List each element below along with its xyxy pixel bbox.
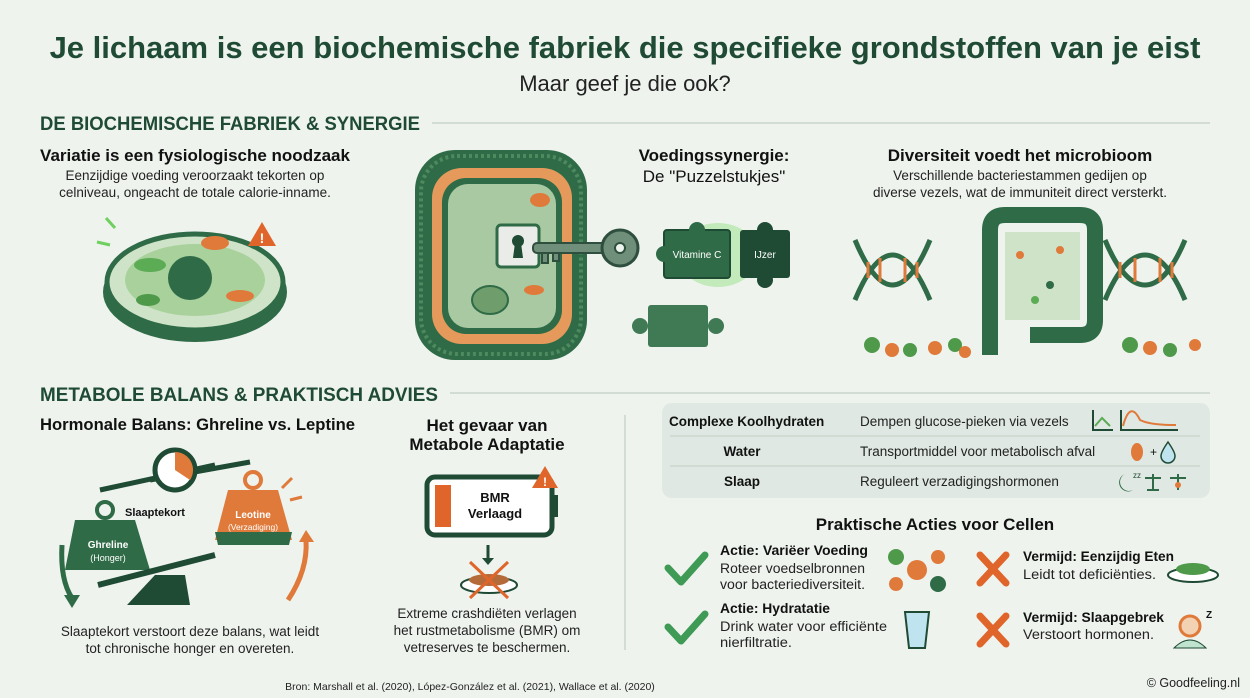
icon: battery: !: [543, 475, 547, 489]
icon: scale: Slaaptekort: [125, 507, 185, 519]
icon: cell: !: [260, 230, 264, 246]
panel: metabole adaptatie: [394, 416, 580, 655]
panel: microbioom: [855, 146, 1201, 358]
action: hydratatie: [668, 600, 929, 650]
icon: moon and scales: zz: [1133, 471, 1141, 480]
icon: cell: [97, 218, 287, 342]
panel: metabole adaptatie: Het gevaar van: [427, 416, 547, 435]
table: nutrients: Slaap: [724, 474, 760, 489]
table: nutrients: Reguleert verzadigingshormonen: [860, 474, 1059, 489]
action: hydratatie: Drink water voor efficiënte: [720, 619, 887, 634]
table: nutrients: Water: [723, 444, 761, 459]
panel: hormonale balans: Slaaptekort verstoort deze balans, wat leidt: [61, 624, 319, 639]
title: Je lichaam is een biochemische fabriek die specifieke grondstoffen van je eist: [50, 30, 1200, 65]
footer: sources: Bron: Marshall et al. (2020), López-González et al. (2021), Wallace et al. (2020): [285, 681, 655, 693]
action: varieer voeding: Actie: Variëer Voeding: [720, 542, 868, 558]
table: nutrients: Dempen glucose-pieken via vezels: [860, 414, 1069, 429]
icon: scale: (Honger): [90, 553, 126, 563]
icon: scale: Ghreline: [88, 540, 129, 551]
action: vermijd slaapgebrek: Z: [1206, 610, 1212, 621]
section heading: metabole: METABOLE BALANS & PRAKTISCH ADVIES: [40, 385, 438, 406]
panel: variatie: celniveau, ongeacht de totale calorie-inname.: [59, 185, 331, 200]
panel: variatie: Eenzijdige voeding veroorzaakt tekorten op: [66, 168, 324, 183]
panel: metabole adaptatie: het rustmetabolisme (BMR) om: [394, 623, 580, 638]
icon: moon and scales: [1119, 471, 1186, 491]
action: hydratatie: Actie: Hydratatie: [720, 600, 830, 616]
table: nutrients: [662, 403, 1210, 498]
panel: voedingssynergie: De "Puzzelstukjes": [643, 167, 785, 186]
panel: voedingssynergie: Voedingssynergie:: [639, 146, 789, 165]
action: vermijd slaapgebrek: Verstoort hormonen.: [1023, 627, 1154, 642]
action: varieer voeding: [668, 542, 946, 592]
icon: scale: Leotine: [235, 510, 271, 521]
icon: battery: [427, 466, 558, 598]
icon: kidney and drop: [1131, 442, 1175, 463]
action: varieer voeding: voor bacteriediversiteit.: [720, 577, 865, 592]
section heading: fabriek: DE BIOCHEMISCHE FABRIEK & SYNERGIE: [40, 114, 420, 135]
action: varieer voeding: Roteer voedselbronnen: [720, 561, 865, 576]
panel: hormonale balans: tot chronische honger en overeten.: [86, 641, 294, 656]
heading: praktische acties: Praktische Acties voor Cellen: [816, 515, 1054, 534]
icon: battery: BMR: [480, 490, 510, 505]
footer: brand: © Goodfeeling.nl: [1147, 676, 1240, 690]
icon: scale: [62, 450, 314, 608]
icon: battery: Verlaagd: [468, 506, 522, 521]
action: vermijd eenzijdig: Vermijd: Eenzijdig Eten: [1023, 548, 1174, 564]
icon: scale: (Verzadiging): [228, 522, 278, 532]
panel: metabole adaptatie: Extreme crashdiëten verlagen: [397, 606, 577, 621]
panel: metabole adaptatie: vetreserves te beschermen.: [404, 640, 570, 655]
panel: variatie: Variatie is een fysiologische noodzaak: [40, 146, 350, 165]
panel: microbioom: diverse vezels, wat de immuniteit direct versterkt.: [873, 185, 1167, 200]
panel: metabole adaptatie: Metabole Adaptatie: [409, 435, 565, 454]
icon: puzzle pieces: Vitamine C: [673, 250, 721, 261]
icon: glucose graphs: [1093, 410, 1178, 430]
icon: DNA and gut: [855, 215, 1201, 358]
panel: hormonale balans: [40, 415, 355, 656]
panel: variatie: [40, 146, 350, 342]
subtitle: Maar geef je die ook?: [519, 71, 731, 96]
action: vermijd slaapgebrek: [980, 609, 1212, 648]
icon: factory cell with key: [415, 150, 638, 360]
icon: puzzle pieces: [632, 222, 790, 347]
action: vermijd slaapgebrek: Vermijd: Slaapgebrek: [1023, 609, 1164, 625]
panel: microbioom: Verschillende bacteriestammen gedijen op: [893, 168, 1147, 183]
table: nutrients: Complexe Koolhydraten: [669, 414, 824, 429]
icon: kidney and drop: +: [1150, 445, 1157, 459]
panel: microbioom: Diversiteit voedt het microbioom: [888, 146, 1152, 165]
action: vermijd eenzijdig: [980, 548, 1218, 583]
icon: puzzle pieces: IJzer: [754, 250, 777, 261]
table: nutrients: Transportmiddel voor metabolisch afval: [860, 444, 1095, 459]
action: vermijd eenzijdig: Leidt tot deficiënties.: [1023, 567, 1156, 582]
panel: voedingssynergie: [632, 146, 790, 347]
panel: hormonale balans: Hormonale Balans: Ghreline vs. Leptine: [40, 415, 355, 434]
action: hydratatie: nierfiltratie.: [720, 635, 792, 650]
